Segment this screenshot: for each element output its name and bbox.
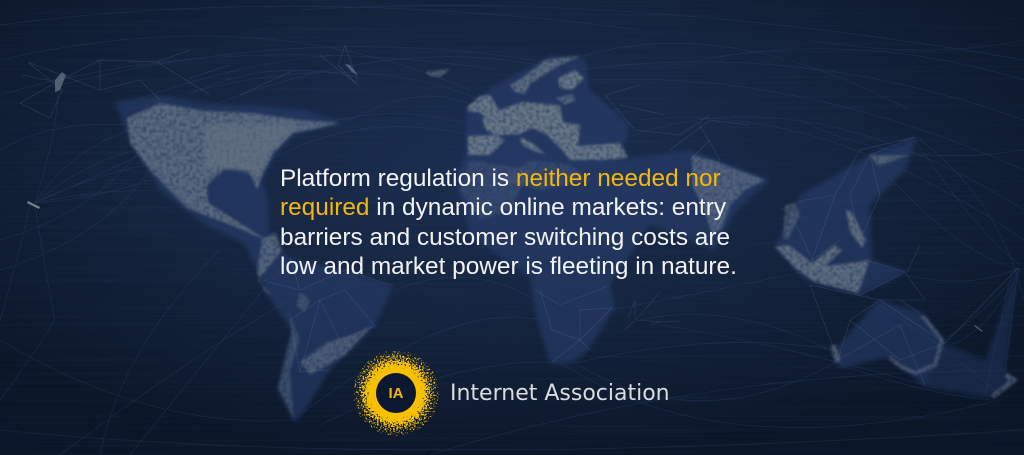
main message text: barriers and customer switching costs are: [280, 224, 730, 251]
logo wordmark: Internet Association: [450, 381, 670, 406]
logo speckled ring: [353, 350, 439, 436]
continent: Europe and Asia base: [455, 55, 770, 364]
main message text: Platform regulation is neither needed nor: [280, 165, 721, 192]
main message text: [280, 165, 737, 280]
continent: South America base: [258, 258, 393, 423]
continent: Middle East and India lights: [460, 155, 765, 235]
logo IA letters: IA: [388, 385, 404, 402]
gulf of Mexico: [209, 171, 253, 211]
continent: South-east Asia lights: [775, 155, 910, 293]
continent: North America lights: [127, 103, 340, 241]
continent: Europe lights: [425, 56, 628, 160]
continent: Australia base: [832, 300, 945, 387]
continent: Australia lights: [833, 315, 1014, 397]
continent mesh lines: [20, 45, 1018, 385]
continent: South-east Asia base: [775, 137, 917, 295]
continent glow: base shapes of all landmasses: [115, 55, 1018, 423]
logo centre disc: [376, 373, 416, 413]
continent: eastern North America dense lights: [205, 122, 300, 175]
continent: North America base: [115, 95, 342, 280]
main message text: required in dynamic online markets: entry: [280, 194, 726, 221]
icon: Internet Association logo: [353, 350, 439, 436]
small island chains: [27, 64, 983, 332]
main message text: low and market power is fleeting in nature.: [280, 253, 737, 280]
continent: Central and South America lights: [257, 232, 372, 420]
